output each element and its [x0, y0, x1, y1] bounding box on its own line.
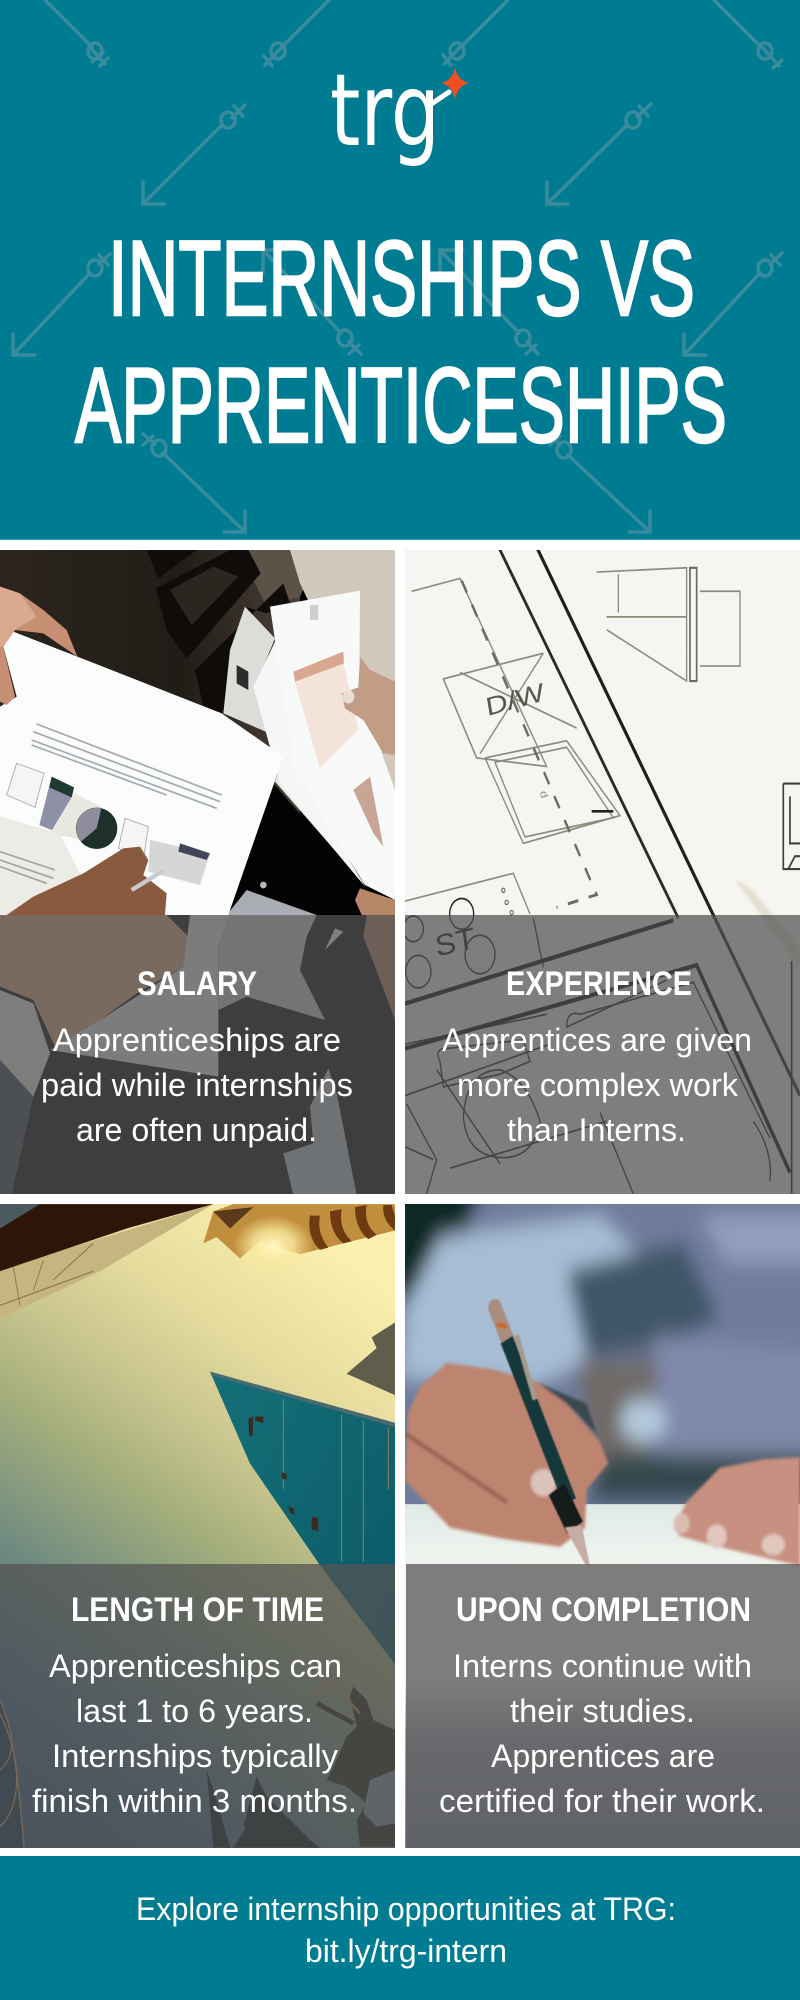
drawing label: D/W: D/W — [484, 677, 547, 722]
text block: length of time — [32, 1648, 357, 1819]
black folder — [230, 784, 300, 912]
tree silhouette — [327, 1687, 395, 1847]
title — [75, 218, 727, 465]
text block: length of time: Internships typically — [52, 1738, 338, 1774]
text block: upon completion: their studies. — [510, 1693, 695, 1729]
heading: experience: EXPERIENCE — [506, 965, 692, 1003]
hand right — [342, 657, 395, 755]
footer — [0, 1856, 800, 2000]
text block: salary: paid while internships — [41, 1067, 353, 1103]
photo: architectural drawing: d — [537, 790, 549, 800]
caption overlay — [0, 915, 395, 1194]
chart on paper — [39, 777, 74, 835]
teal tower — [210, 1372, 395, 1664]
hand bottom — [7, 847, 167, 915]
footer call to action: Explore internship opportunities at TRG: — [136, 1891, 676, 1927]
icon: orange star — [441, 67, 469, 100]
text block: salary: are often unpaid. — [76, 1112, 317, 1148]
photo: architectural drawing — [403, 549, 800, 1194]
caption overlay — [405, 915, 800, 1194]
hand top left — [0, 587, 77, 705]
photo: hands holding reports — [0, 550, 395, 917]
sunlit tower — [203, 1204, 395, 1258]
heading: upon completion: UPON COMPLETION — [456, 1591, 751, 1629]
right tower — [347, 1322, 395, 1395]
thick diagonals — [499, 549, 678, 918]
text block: experience: than Interns. — [507, 1112, 686, 1148]
panel: salary — [0, 550, 395, 1195]
writing hand — [405, 1363, 608, 1547]
logo: trg: trg — [330, 52, 440, 169]
photo: hand writing with a pen — [405, 1204, 800, 1848]
photo: lower part of the scene — [0, 915, 395, 1195]
caption overlay — [406, 1564, 800, 1848]
text block: experience: more complex work — [457, 1067, 739, 1103]
resting hand — [673, 1457, 800, 1566]
text block: upon completion — [439, 1648, 765, 1819]
text block: salary: Apprenticeships are — [53, 1022, 341, 1058]
photo: skyscrapers and sky — [0, 1204, 395, 1664]
caption overlay — [0, 1564, 395, 1848]
heading: salary: SALARY — [137, 965, 257, 1003]
panel: length of time — [0, 1204, 395, 1848]
drawing label: ST: ST — [433, 921, 477, 963]
footer link: bit.ly/trg-intern — [305, 1933, 507, 1969]
text block: experience: Apprentices are given — [442, 1022, 752, 1058]
panel: experience — [403, 549, 800, 1194]
wall frames — [156, 550, 261, 658]
text block: upon completion: certified for their work. — [439, 1783, 765, 1819]
pen — [495, 1308, 590, 1566]
text block: upon completion: Apprentices are — [491, 1738, 715, 1774]
text block: length of time: Apprenticeships can — [49, 1648, 342, 1684]
header panel — [0, 0, 800, 540]
papers right — [223, 607, 275, 735]
arrow pattern background — [13, 0, 782, 532]
curved building left — [0, 1700, 24, 1848]
panel: upon completion — [405, 1204, 800, 1848]
main paper — [0, 632, 283, 915]
text block: experience — [442, 1028, 750, 1142]
text block: length of time: last 1 to 6 years. — [76, 1693, 313, 1729]
heading: length of time: LENGTH OF TIME — [71, 1591, 324, 1629]
lower drawing — [403, 899, 770, 1194]
text block: upon completion: Interns continue with — [453, 1648, 752, 1684]
photo: silhouettes under the caption — [0, 1680, 395, 1848]
text block: length of time: finish within 3 months. — [32, 1783, 357, 1819]
text block: salary — [41, 1022, 353, 1148]
